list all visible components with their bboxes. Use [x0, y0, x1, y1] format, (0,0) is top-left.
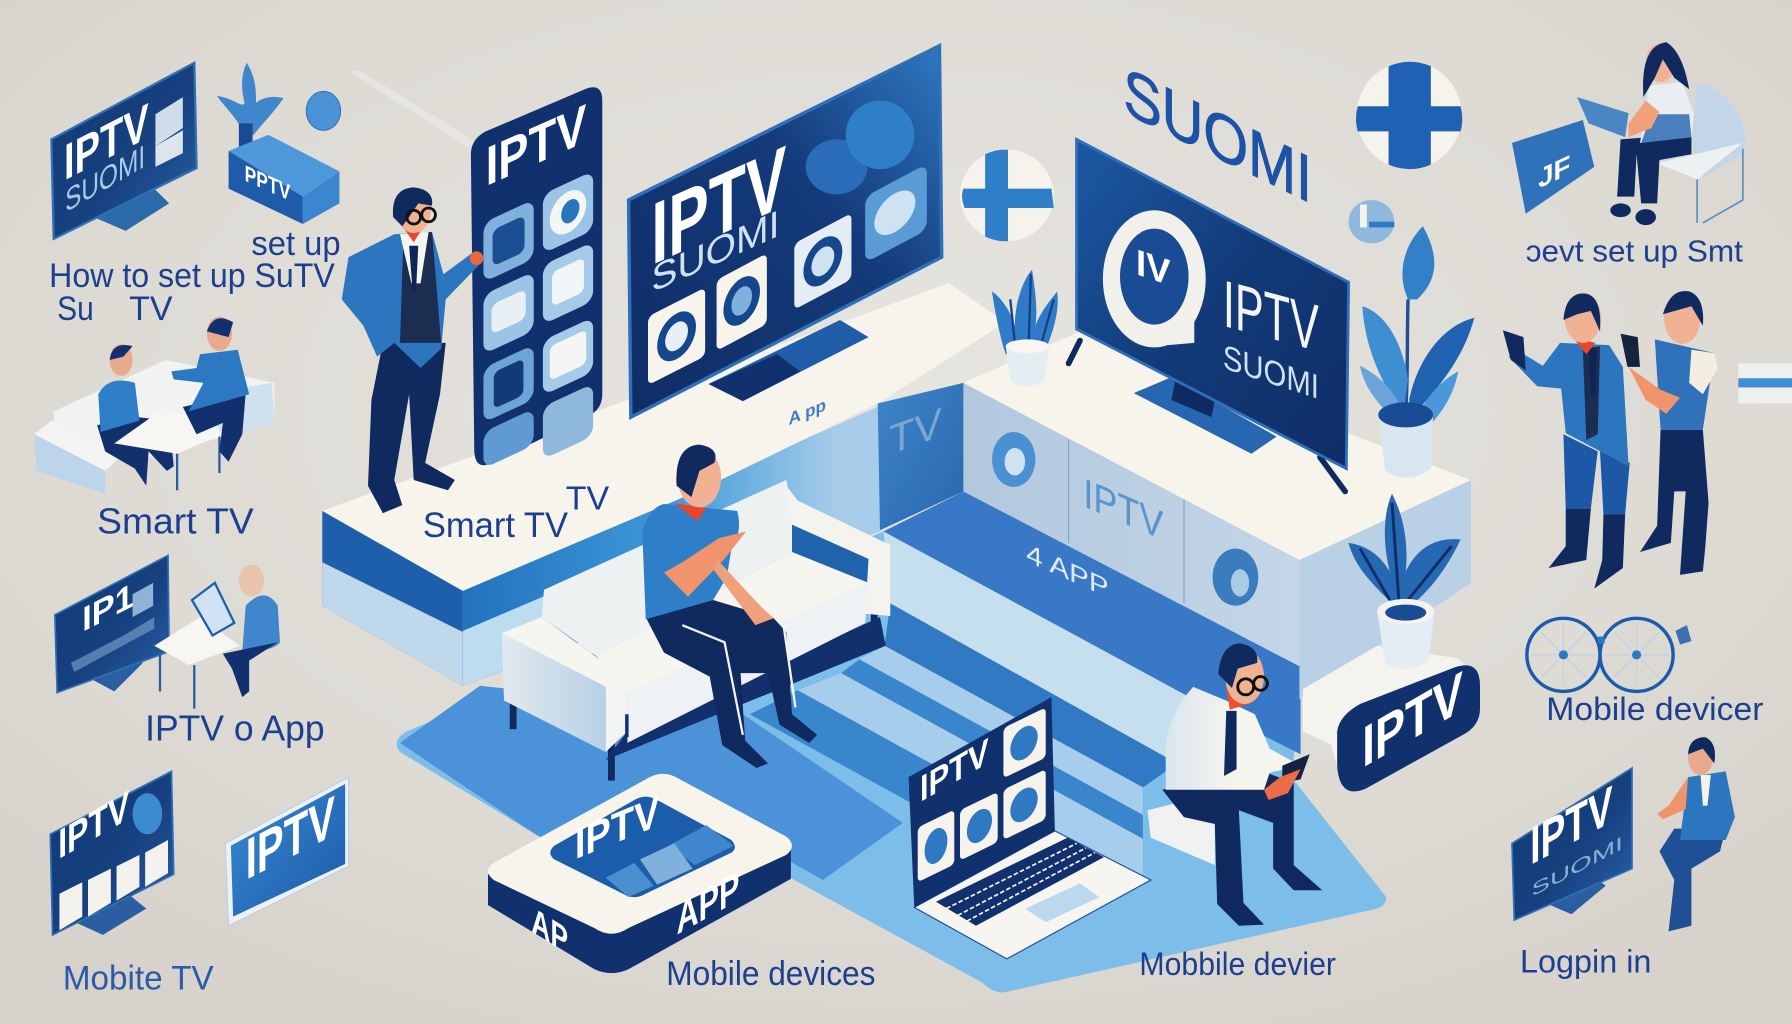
- panel: TV and person at table: IP1: [82, 575, 134, 640]
- plant: lower plant with pot: [1349, 494, 1461, 669]
- panel: TV with app tiles: [50, 771, 174, 935]
- panel: left white platform: [322, 283, 1006, 686]
- small label A pp: A pp: [789, 395, 826, 429]
- heading: set up: set up: [251, 225, 341, 263]
- panel: TV console: [889, 331, 1471, 699]
- panel: app platform: IPTV: [575, 786, 659, 869]
- heading: SUOMI: SUOMI: [1123, 52, 1312, 218]
- panel: app platform: [488, 774, 792, 973]
- heading: Su TV: Su: [57, 290, 94, 328]
- heading: Su TV: [57, 290, 173, 328]
- panel: central TV: SUOMI: [651, 202, 779, 301]
- panel: top-left TV: [51, 63, 197, 239]
- panel: sofa: [502, 480, 890, 781]
- seated person: [1657, 737, 1735, 931]
- man in vest: [1621, 291, 1718, 575]
- badge: IPTV: [1337, 659, 1480, 791]
- panel: login TV with person: [1512, 737, 1735, 931]
- heading: how to set up: How to set up SuTV: [49, 257, 335, 295]
- icon: wheels: [1527, 618, 1691, 691]
- logo ring: [1103, 210, 1206, 347]
- figure: man on sofa: [642, 445, 817, 768]
- logo ring: IV: [1136, 241, 1171, 293]
- table: [154, 617, 240, 665]
- platform label APP: APP: [677, 861, 739, 944]
- plant: tall plant on console: [1360, 226, 1474, 478]
- tablet: [192, 583, 234, 635]
- panel: central TV: [629, 46, 942, 417]
- tablet: [1512, 120, 1594, 214]
- panel: TV and person at table: [55, 555, 280, 709]
- man in suit: [1503, 293, 1630, 589]
- panel: plant and box: [217, 63, 341, 224]
- panel: login TV with person: IPTV: [1530, 773, 1613, 876]
- tablet: JF: [1538, 150, 1570, 195]
- heading: Su TV: TV: [129, 290, 173, 328]
- blue floor rug with stripes: [397, 491, 1386, 992]
- panel: plant and box: PPTV: [245, 161, 290, 207]
- heading: Login in: Logpin in: [1520, 944, 1651, 980]
- panel: login TV with person: SUOMI: [1531, 833, 1623, 902]
- panel: app tile phone: [471, 87, 602, 469]
- panel: top-left TV: SUOMI: [65, 139, 145, 220]
- panel: laptop: [909, 697, 1151, 959]
- heading: IPTV o App: IPTV o App: [145, 708, 325, 749]
- panel: two people on sofa: [34, 317, 274, 494]
- platform label AP: AP: [531, 899, 568, 963]
- chair: [1657, 82, 1746, 223]
- heading: next set up: ɔevt set up Smt: [1526, 234, 1743, 269]
- console label IPTV: IPTV: [1083, 470, 1164, 550]
- person right: [171, 317, 249, 462]
- icon: console badge left: [992, 432, 1035, 487]
- icon: small flag ball: [1349, 200, 1394, 243]
- person left: [97, 344, 174, 486]
- icon: console badge right: [1213, 549, 1258, 606]
- heading: Smart TV left: Smart TV: [97, 501, 254, 542]
- floor label A APP: 4 APP: [1026, 537, 1109, 604]
- icon: Finnish flag small: [960, 150, 1054, 241]
- person: [242, 595, 280, 651]
- panel: laptop: IPTV: [920, 730, 989, 811]
- panel: top-left TV: IPTV: [64, 93, 149, 192]
- heading: Mobite TV: Mobite TV: [63, 960, 214, 998]
- figure: standing man in suit: [342, 187, 483, 513]
- panel: app tile phone: IPTV: [486, 93, 586, 199]
- panel: TV with app tiles: IPTV: [58, 782, 129, 869]
- heading: Mobbile devier: Mobbile devier: [1139, 946, 1336, 982]
- coffee table: [114, 407, 225, 490]
- heading: Mobile devices: Mobile devices: [666, 955, 875, 993]
- badge: IPTV: IPTV: [1362, 659, 1463, 781]
- console wall label TV: TV: [889, 400, 942, 465]
- panel: main TV: SUOMI: [1223, 338, 1319, 407]
- panel: central TV: IPTV: [651, 128, 786, 284]
- plinth under badge: [1303, 646, 1480, 789]
- figure: two men with phones: [1503, 291, 1718, 589]
- icon: Finnish flag large: [1356, 62, 1462, 169]
- small label TV: TV: [566, 481, 609, 518]
- heading: Mobile devicer: Mobile devicer: [1546, 691, 1764, 727]
- panel: IPTV blue card: [225, 777, 349, 926]
- figure: man with phone: [1147, 643, 1322, 926]
- panel: main TV: [1069, 139, 1349, 491]
- panel: main TV: IPTV: [1223, 267, 1319, 366]
- figure: woman with laptop: [1512, 42, 1746, 225]
- plant: small on platform: [992, 270, 1058, 386]
- faint light streak: [349, 71, 491, 155]
- icon: wall clock: [306, 91, 341, 130]
- panel: IPTV blue card: IPTV: [246, 783, 335, 892]
- small label Smart TV centre: Smart TV: [423, 505, 568, 545]
- icon: flag strip: [1738, 363, 1792, 403]
